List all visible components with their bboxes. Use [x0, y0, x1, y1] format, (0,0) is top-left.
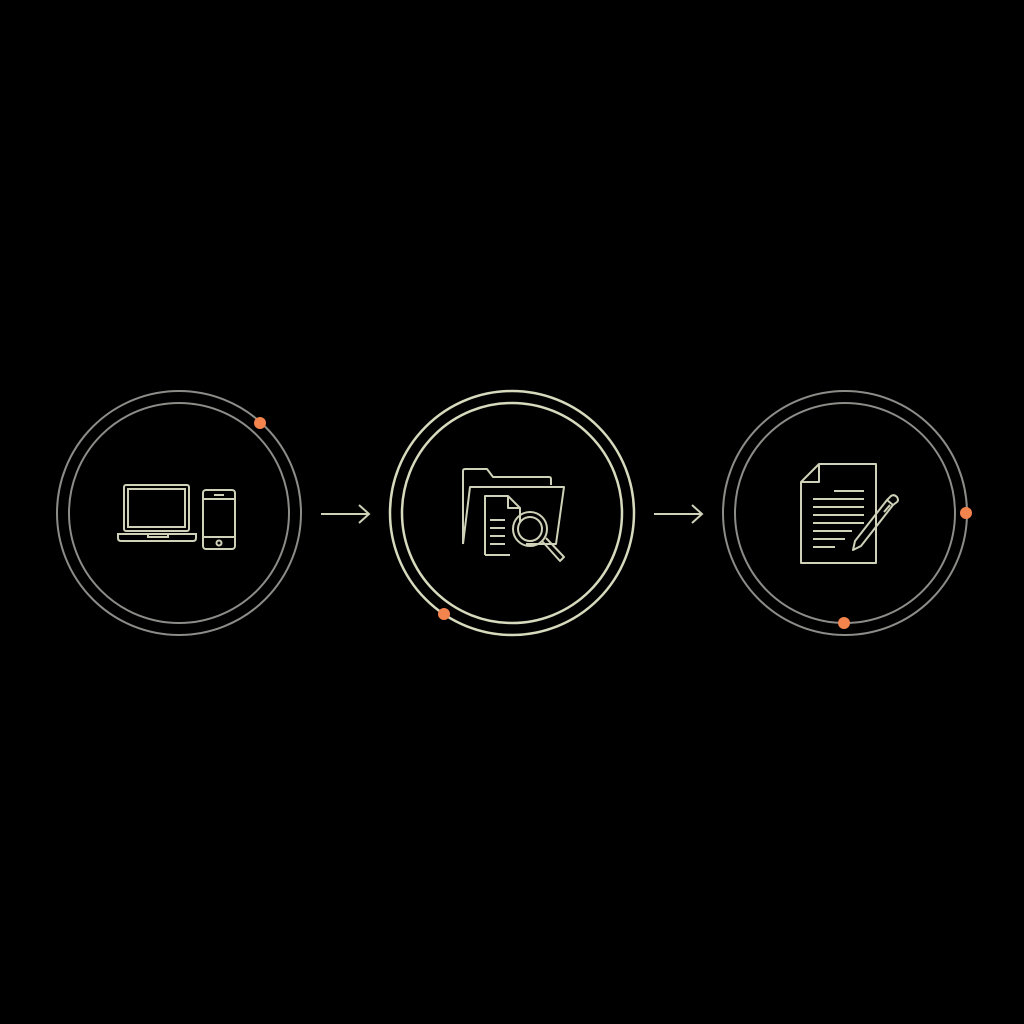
panel: step 1 devices — [57, 391, 301, 635]
marker dot — [438, 608, 450, 620]
icon: laptop and phone — [118, 485, 235, 549]
panel: step 3 document signing — [723, 391, 972, 635]
arrow: step 2 to 3 — [654, 505, 702, 523]
icon: folder with magnifier — [463, 469, 564, 561]
arrow: step 1 to 2 — [321, 505, 369, 523]
marker dots — [960, 507, 972, 519]
marker dot — [254, 417, 266, 429]
icon: document with pen — [801, 464, 898, 563]
panel: step 2 file search — [390, 391, 634, 635]
